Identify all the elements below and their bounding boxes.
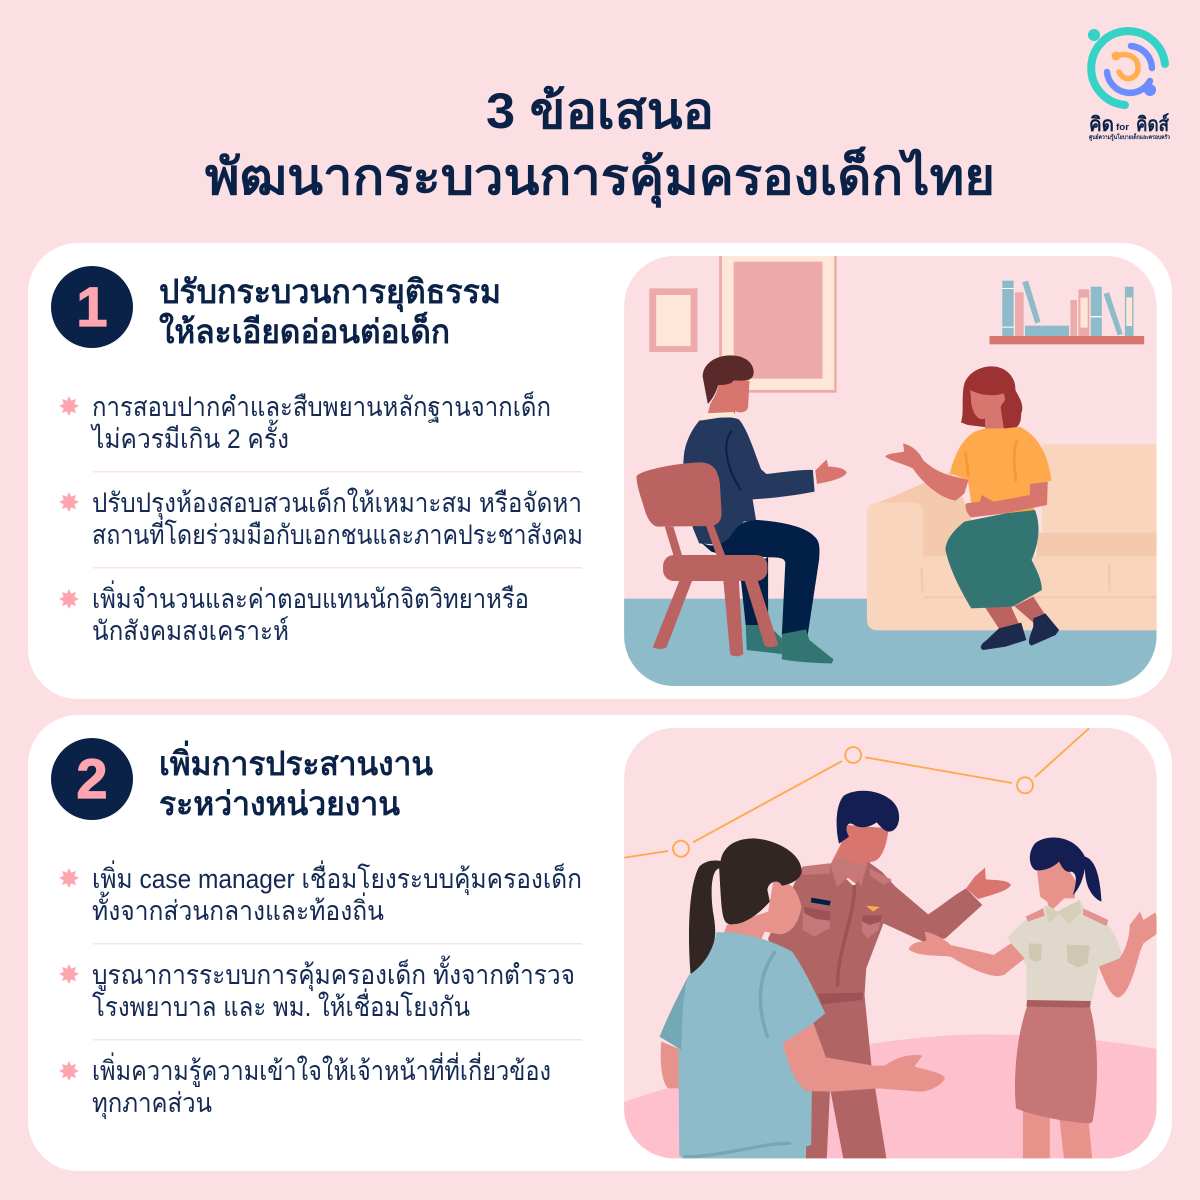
- bookshelf: [990, 281, 1144, 344]
- bullet 1.3: [59, 580, 529, 646]
- bullet 2.2: บูรณาการระบบการคุ้มครองเด็ก ทั้งจากตำรวจ: [92, 955, 575, 992]
- logo: คิด for คิดส์: ศูนย์ความรู้นโยบายเด็กและครอบครัว: [1089, 132, 1171, 142]
- bullet 1.3: เพิ่มจำนวนและค่าตอบแทนนักจิตวิทยาหรือ: [92, 580, 529, 614]
- logo: คิด for คิดส์: คิด: [1089, 114, 1114, 136]
- number badge 1: [51, 266, 133, 348]
- heading 1: ให้ละเอียดอ่อนต่อเด็ก: [159, 311, 450, 350]
- bullet 2.3: เพิ่มความรู้ความเข้าใจให้เจ้าหน้าที่ที่เกี่ยวข้อง: [92, 1052, 551, 1087]
- bullet 2.1: [59, 860, 582, 926]
- sofa: [867, 444, 1162, 630]
- heading 1: [159, 273, 501, 350]
- man in chair: [683, 355, 847, 663]
- title: [205, 83, 995, 208]
- title: พัฒนากระบวนการคุ้มครองเด็กไทย: [205, 146, 995, 208]
- logo: คิด for คิดส์: คิดส์: [1136, 113, 1170, 136]
- woman on sofa: [885, 366, 1059, 650]
- woman in teal scrubs: [660, 838, 945, 1162]
- wall pictures: [649, 253, 837, 393]
- panel: card 1: [28, 243, 1172, 699]
- logo: คิด for คิดส์: for: [1116, 122, 1130, 132]
- bullet 2.2: โรงพยาบาล และ พม. ให้เชื่อมโยงกัน: [92, 988, 470, 1022]
- bullet 2.3: ทุกภาคส่วน: [92, 1088, 212, 1120]
- title: 3 ข้อเสนอ: [486, 83, 714, 139]
- illustration: interview room: [624, 256, 1157, 686]
- bullet 1.1: [59, 389, 551, 454]
- heading 2: ระหว่างหน่วยงาน: [159, 785, 400, 822]
- heading 1: ปรับกระบวนการยุติธรรม: [159, 273, 501, 313]
- bullet 2.3: [59, 1052, 551, 1120]
- bullet 1.1: การสอบปากคำและสืบพยานหลักฐานจากเด็ก: [92, 389, 551, 423]
- bullet 1.2: [59, 485, 583, 550]
- number badge 1: 1: [76, 275, 108, 338]
- bullet 1.1: ไม่ควรมีเกิน 2 ครั้ง: [90, 419, 289, 454]
- woman in beige uniform: [909, 837, 1160, 1162]
- panel: card 2: [28, 715, 1172, 1171]
- chair: [637, 462, 778, 656]
- bullet 2.1: ทั้งจากส่วนกลางและท้องถิ่น: [92, 891, 384, 926]
- number badge 2: [51, 738, 133, 820]
- heading 2: เพิ่มการประสานงาน: [159, 740, 433, 782]
- bullet 1.2: สถานที่โดยร่วมมือกับเอกชนและภาคประชาสังคม: [92, 516, 583, 550]
- bullet 1.2: ปรับปรุงห้องสอบสวนเด็กให้เหมาะสม หรือจัดหา: [92, 485, 582, 520]
- bullet 2.2: [59, 955, 575, 1022]
- number badge 2: 2: [76, 747, 108, 810]
- bullet 1.3: นักสังคมสงเคราะห์: [92, 615, 289, 646]
- logo: คิด for คิดส์: [1088, 29, 1171, 142]
- orange line chart: [624, 728, 1089, 858]
- officer in uniform: [768, 791, 1011, 1162]
- heading 2: [159, 740, 433, 822]
- illustration: officials talking: [624, 728, 1157, 1158]
- bullet 2.1: เพิ่ม case manager เชื่อมโยงระบบคุ้มครองเด็ก: [92, 860, 582, 896]
